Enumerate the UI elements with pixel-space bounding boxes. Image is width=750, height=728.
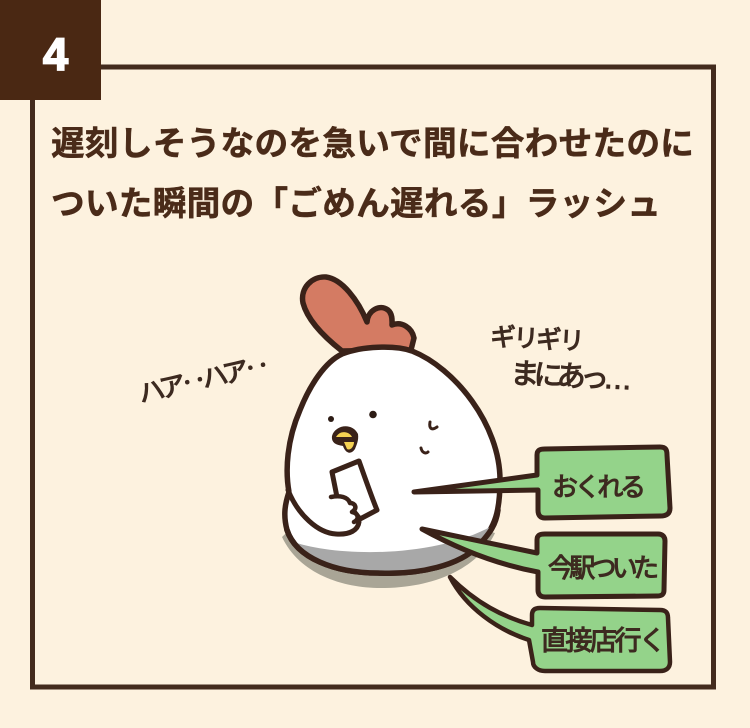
title: ついた瞬間の「ごめん遅れる」ラッシュ [51, 185, 661, 223]
arm [288, 490, 359, 534]
speech bubble 2 [422, 529, 665, 597]
body [285, 347, 500, 573]
number badge [0, 0, 101, 100]
number badge: 4 [43, 29, 68, 80]
body underside shade [291, 526, 492, 571]
speech bubble 1 [414, 447, 670, 518]
chick illustration [282, 277, 500, 588]
cheek marks [421, 422, 437, 453]
speech bubble 3: 直接店行く [541, 626, 666, 656]
title: 遅刻しそうなのを急いで間に合わせたのに [51, 125, 694, 163]
panel frame [32, 67, 714, 687]
speech bubble 1: おくれる [552, 472, 646, 502]
eyes [328, 411, 377, 422]
speech: ギリギリ: ギリギリ [490, 323, 585, 356]
speech bubble 2: 今駅ついた [548, 553, 659, 583]
beak [332, 426, 358, 453]
ground shadow [282, 520, 495, 588]
speech: ハアハア: ハア‥ハア‥ [136, 349, 273, 409]
title [51, 125, 694, 223]
comb [303, 277, 414, 351]
phone and hand [331, 461, 377, 522]
speech bubble 3 [450, 577, 670, 671]
speech: まにあっ: まにあっ… [510, 358, 633, 396]
